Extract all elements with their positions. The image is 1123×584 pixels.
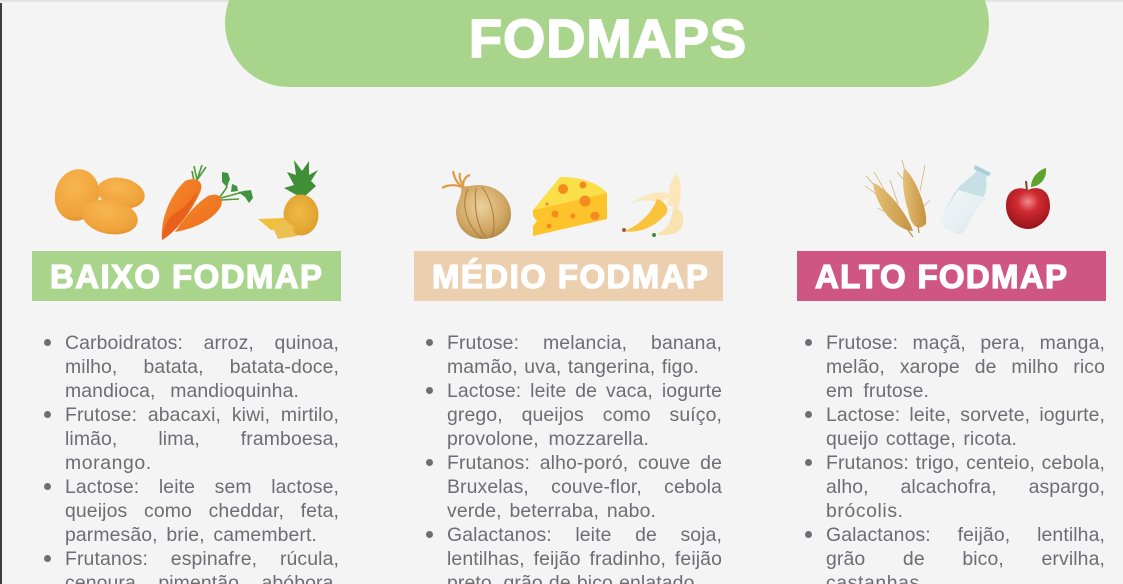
item: lactose: grego, queijos como suíço, bbox=[447, 404, 722, 426]
item: carboidratos bbox=[65, 331, 339, 403]
item: carboidratos: milho, batata, batata-doce, bbox=[65, 356, 339, 378]
item: lactose bbox=[65, 475, 339, 547]
item: galactanos: Galactanos: leite de soja, bbox=[447, 524, 722, 546]
item: frutanos: Bruxelas, couve-flor, cebola bbox=[447, 476, 722, 498]
item: frutanos bbox=[826, 451, 1105, 523]
item: lactose: queijos como cheddar, feta, bbox=[65, 500, 339, 522]
item: carboidratos: Carboidratos: arroz, quinoa, bbox=[65, 332, 339, 354]
list: alto fodmap bbox=[805, 332, 1105, 584]
item: frutanos: Frutanos: trigo, centeio, cebola, bbox=[826, 452, 1105, 474]
item: frutose: Frutose: melancia, banana, bbox=[447, 332, 722, 354]
item: frutose: melão, xarope de milho rico bbox=[826, 356, 1105, 378]
item: lactose: provolone, mozzarella. bbox=[447, 428, 649, 450]
item: frutose: limão, lima, framboesa, bbox=[65, 428, 339, 450]
icon: carrots bbox=[162, 165, 253, 240]
item: lactose: Lactose: leite sem lactose, bbox=[65, 476, 339, 498]
item: lactose: parmesão, brie, camembert. bbox=[65, 524, 317, 546]
item: galactanos: grão de bico, ervilha, bbox=[826, 548, 1105, 570]
icon: pineapple bbox=[258, 160, 318, 239]
heading: alto fodmap: ALTO FODMAP bbox=[815, 258, 1067, 295]
item: frutanos: brócolis. bbox=[826, 500, 904, 522]
list: medio fodmap bbox=[426, 332, 722, 584]
item: frutose bbox=[447, 331, 722, 379]
item: frutose bbox=[65, 403, 339, 475]
heading: baixo fodmap: BAIXO FODMAP bbox=[50, 258, 322, 295]
item: frutose: morango. bbox=[65, 452, 152, 474]
item: galactanos bbox=[826, 523, 1105, 584]
item: frutanos: Frutanos: espinafre, rúcula, bbox=[65, 548, 339, 570]
item: lactose: Lactose: leite, sorvete, iogurte, bbox=[826, 404, 1105, 426]
item: frutose: Frutose: abacaxi, kiwi, mirtilo, bbox=[65, 404, 339, 426]
item: galactanos: Galactanos: feijão, lentilha, bbox=[826, 524, 1105, 546]
item: lactose: queijo cottage, ricota. bbox=[826, 428, 1017, 450]
item: galactanos: lentilhas, feijão fradinho, feijão bbox=[447, 548, 722, 570]
item: frutose: em frutose. bbox=[826, 380, 929, 402]
item: frutose: Frutose: maçã, pera, manga, bbox=[826, 332, 1105, 354]
heading box: baixo bbox=[32, 251, 341, 301]
icon: cheese bbox=[533, 177, 607, 236]
title: FODMAPS bbox=[469, 9, 746, 69]
heading box: medio bbox=[414, 251, 723, 301]
item: frutanos: verde, beterraba, nabo. bbox=[447, 500, 656, 522]
item: lactose bbox=[447, 379, 722, 451]
item: frutanos bbox=[65, 547, 339, 584]
icon: banana bbox=[622, 174, 683, 237]
item: carboidratos: mandioca, mandioquinha. bbox=[65, 380, 299, 402]
heading box: alto bbox=[797, 251, 1106, 301]
icon: milk bottle bbox=[941, 165, 991, 234]
item: frutose: mamão, uva, tangerina, figo. bbox=[447, 356, 699, 378]
item: galactanos bbox=[447, 523, 722, 584]
item: frutanos: alho, alcachofra, aspargo, bbox=[826, 476, 1105, 498]
icon: wheat bbox=[865, 160, 930, 237]
icon: potatoes bbox=[49, 164, 148, 239]
item: frutose bbox=[826, 331, 1105, 403]
item: lactose: Lactose: leite de vaca, iogurte bbox=[447, 380, 722, 402]
item: frutanos bbox=[447, 451, 722, 523]
heading: medio fodmap: MÉDIO FODMAP bbox=[432, 258, 708, 295]
icon: onion bbox=[442, 171, 511, 239]
item: frutanos: Frutanos: alho-poró, couve de bbox=[447, 452, 722, 474]
item: lactose bbox=[826, 403, 1105, 451]
list: baixo fodmap bbox=[44, 332, 339, 584]
icon: apple bbox=[1006, 168, 1050, 229]
title banner bbox=[225, 0, 989, 87]
